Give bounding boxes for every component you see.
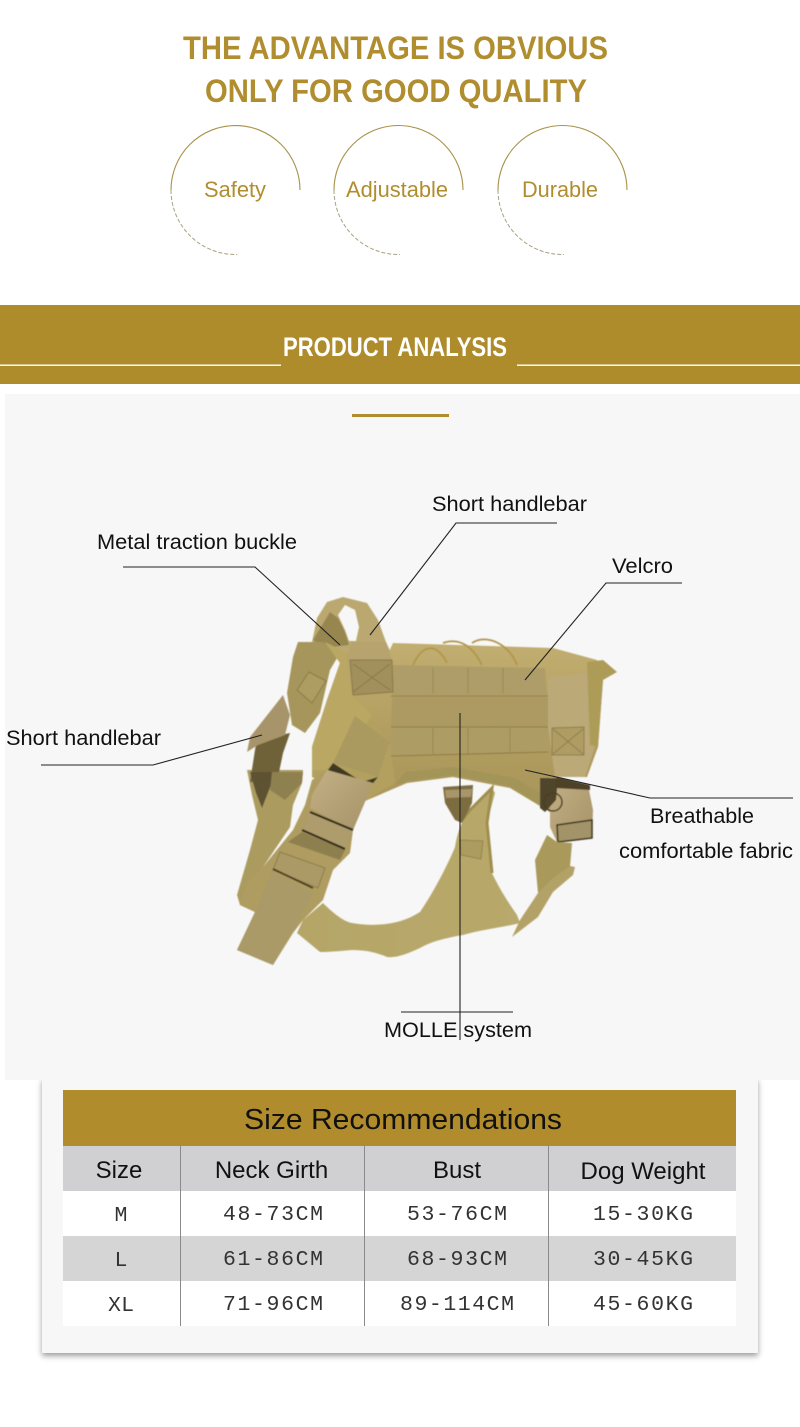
handle flap (347, 642, 393, 695)
callout: velcro (525, 554, 682, 680)
feature circle: Safety: Safety (204, 177, 266, 202)
table header row: Bust (433, 1157, 481, 1184)
row M: 48-73CM (223, 1203, 323, 1227)
row XL: XL (108, 1294, 134, 1318)
panel: size table card (36, 1072, 766, 1353)
feature circle: Durable (498, 126, 627, 255)
feature circle: Safety (171, 126, 300, 255)
pouch (287, 642, 340, 733)
row XL: 71-96CM (223, 1293, 323, 1317)
callout: short handlebar top: Short handlebar (432, 492, 587, 516)
feature circle: Adjustable (334, 126, 463, 255)
belly band (297, 788, 520, 957)
feature circle: Durable: Durable (522, 177, 598, 202)
callout: short handlebar top (370, 492, 587, 635)
section banner: product analysis: PRODUCT ANALYSIS (283, 332, 507, 362)
row L: 61-86CM (223, 1248, 323, 1272)
table header row (63, 1146, 736, 1191)
row L: L (115, 1249, 127, 1273)
callout: metal traction buckle (97, 530, 340, 645)
callout: MOLLE system (384, 713, 532, 1042)
row L: 68-93CM (407, 1248, 507, 1272)
main body (312, 642, 603, 812)
panel: product analysis (5, 394, 800, 1080)
feature circle: Adjustable: Adjustable (346, 177, 448, 202)
table title (63, 1090, 736, 1146)
middle strap buckle (443, 785, 473, 823)
rear left strap (237, 770, 303, 912)
lower hem (395, 767, 555, 812)
section banner: product analysis (0, 305, 800, 384)
front long strap (237, 770, 373, 965)
title: THE ADVANTAGE IS OBVIOUS (183, 30, 608, 66)
table header row: Dog Weight (581, 1158, 706, 1185)
callout: MOLLE system: MOLLE system (384, 1018, 532, 1042)
table header row: Neck Girth (215, 1157, 328, 1184)
size recommendations table (63, 1090, 736, 1326)
callout: breathable comfortable fabric: comfortable fabric (619, 839, 793, 863)
column dividers (180, 1146, 549, 1326)
callout: breathable comfortable fabric (525, 770, 793, 863)
table header row: Size (96, 1157, 142, 1184)
handle (312, 597, 392, 656)
product image: tactical dog harness (237, 597, 617, 965)
row M: M (115, 1204, 127, 1228)
callout: short handlebar left (6, 726, 262, 765)
velcro panels (392, 665, 547, 695)
callout: velcro: Velcro (612, 554, 673, 578)
title: ONLY FOR GOOD QUALITY (205, 73, 587, 109)
right leg strap (535, 835, 572, 893)
callout: breathable comfortable fabric: Breathable (650, 804, 754, 828)
right buckle (550, 777, 593, 842)
chest strap tab (333, 716, 390, 777)
right strap (548, 673, 595, 777)
row M: 15-30KG (593, 1203, 693, 1227)
row XL (63, 1281, 736, 1326)
row M: 53-76CM (407, 1203, 507, 1227)
callout: metal traction buckle: Metal traction buckle (97, 530, 297, 554)
callout: short handlebar left: Short handlebar (6, 726, 161, 750)
bungee cords (413, 639, 517, 665)
row XL: 45-60KG (593, 1293, 693, 1317)
row L: 30-45KG (593, 1248, 693, 1272)
title (183, 30, 608, 109)
table title: Size Recommendations (244, 1104, 562, 1136)
row XL: 89-114CM (400, 1293, 514, 1317)
row M (63, 1191, 736, 1236)
row L (63, 1236, 736, 1281)
